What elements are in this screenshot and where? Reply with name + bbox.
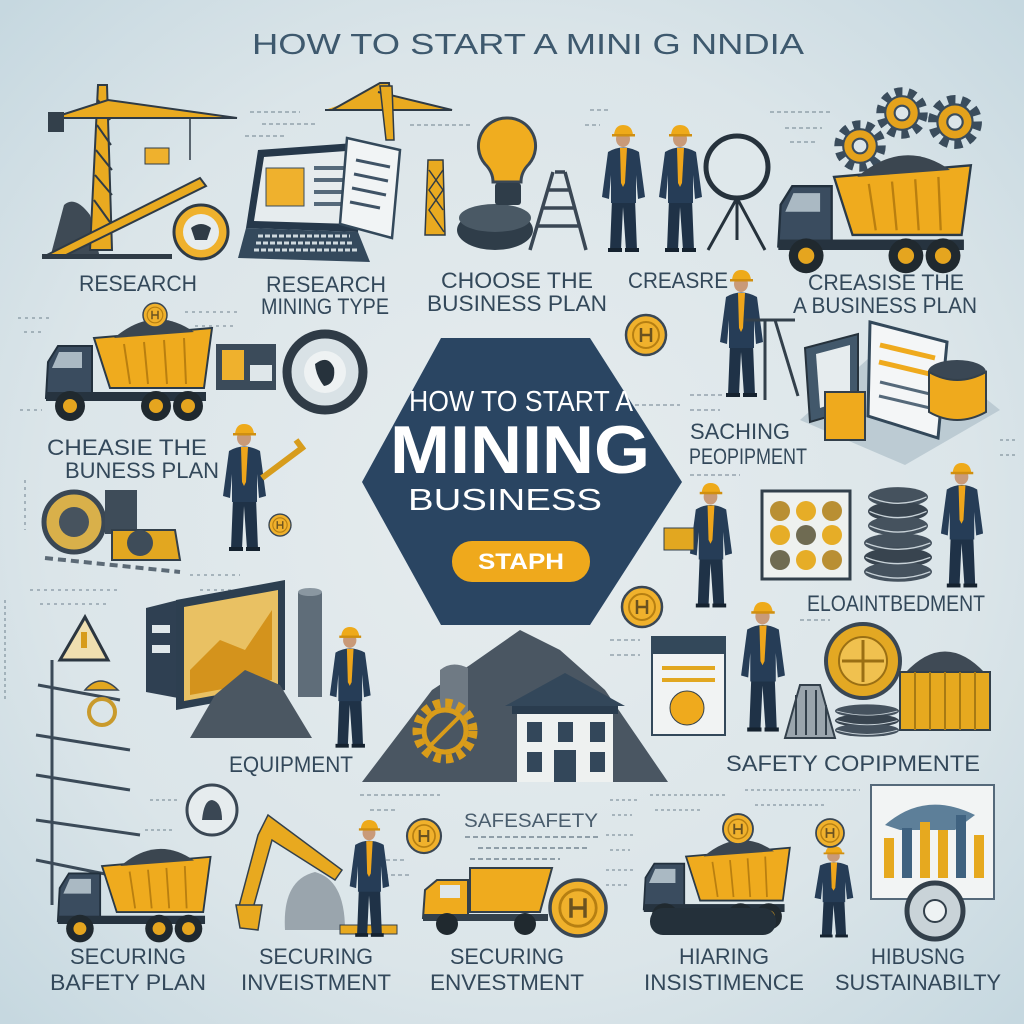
rock pile [190,670,312,738]
title: HOW TO START A MINI G NNDIA [252,29,805,61]
label: sacring equipment: SACHING [690,419,790,444]
panel: left scaffold [36,617,140,905]
monitor [176,580,285,710]
machinery rollers [785,685,899,738]
label: choose the business plan [427,268,607,316]
panel: lower right safety [652,602,990,738]
label: research mining type: RESEARCH [266,272,386,297]
silo [440,664,468,725]
label: sacring equipment [689,419,807,469]
mountain [362,630,668,782]
big gear coin [826,624,900,698]
panel: bottom excavator [236,815,397,937]
label: securing investment two [430,944,584,995]
label: equipment: EQUIPMENT [229,752,353,777]
label: chease the business plan [47,435,219,483]
label: securing investment one: INVEISTMENT [241,970,391,995]
label: chease the business plan: CHEASIE THE [47,435,207,460]
label: securing investment one: SECURING [259,944,373,969]
panel: idea bulb and ladder [425,118,586,250]
label: housing sustainability: SUSTAINABILTY [835,970,1001,995]
label: safety equipment: SAFETY COPIPMENTE [726,751,980,776]
panel: right equipment row [622,463,983,627]
panel: laptop and documents [238,83,452,262]
label: housing sustainability [835,944,1001,995]
panel: monitor and rock pile [146,580,371,748]
dump truck [778,155,971,273]
label: securing investment two: ENVESTMENT [430,970,584,995]
excavator [236,815,397,934]
machinery cluster [44,490,180,572]
bar chart [871,785,994,899]
worker [720,270,763,397]
label: securing safety plan [50,944,206,995]
surveying tool [262,440,302,478]
panel: research crane [42,85,237,259]
panel: truck and gears [778,92,977,273]
coin [269,514,291,536]
coin [622,587,662,627]
label: equipment upper: ELOAINTBEDMENT [807,591,985,616]
gears [839,92,977,167]
worker [941,463,983,587]
barrel [928,360,986,420]
button: STAPH [478,549,564,574]
worker [223,424,266,551]
coiled rope [89,699,115,725]
survey table [745,320,798,400]
label: chease the business plan: BUNESS PLAN [65,458,219,483]
worker [350,820,389,937]
gear [417,703,473,759]
label: crease the business plan: A BUSINESS PLAN [793,293,977,318]
label: housing sustainability: HIBUSNG [871,944,965,969]
label: securing safety plan: SECURING [70,944,186,969]
panel: bottom chart and worker [815,785,994,939]
panel: mountain and bank building [362,630,668,782]
coin [626,315,666,355]
hexagon main word: MINING [390,412,650,488]
tire stacks [864,487,932,582]
small coin [407,819,441,853]
label: research mining type [261,272,389,319]
button [452,541,590,582]
label: securing investment one [241,944,391,995]
panel: second row truck [46,303,363,421]
building [505,673,625,782]
dump truck [46,319,212,421]
panel: upper right worker and documents [626,270,1000,465]
panel: bottom tracked truck [644,814,790,935]
dump truck [58,849,211,942]
gear [907,883,963,939]
dark dial [287,334,363,410]
worker with box [690,483,732,607]
hexagon subheading: BUSINESS [408,482,602,517]
panel: left worker and machinery [44,424,302,572]
label: hiring insurance: INSISTIMENCE [644,970,804,995]
coin [550,880,606,936]
tracked truck body [644,840,790,930]
warning sign [60,617,108,660]
server tower [146,600,178,698]
helmet [85,681,118,690]
label: securing investment two: SECURING [450,944,564,969]
label: crease the business plan [793,270,977,318]
worker right [659,125,702,252]
box [664,528,694,550]
coin small [143,303,167,327]
yellow truck [423,868,552,935]
label: hiring insurance [644,944,804,995]
binder [805,334,865,440]
worker [815,846,853,937]
label: sacring equipment: PEOPIPMENT [689,444,807,469]
magnifier on tripod [706,136,768,250]
badge [187,785,237,835]
worker left [602,125,645,252]
label: hiring insurance: HIARING [679,944,769,969]
hexagon heading: HOW TO START A [409,386,634,418]
label: research: RESEARCH [79,271,197,296]
control box [216,344,276,390]
pipe [298,588,322,697]
label: crease: CREASRE [628,268,728,293]
panel: centre hexagon [362,338,682,625]
ground diamond [800,330,1000,465]
coin [723,814,753,844]
label: crease the business plan: CREASISE THE [808,270,964,295]
label: research mining type: MINING TYPE [261,294,389,319]
report [868,322,947,438]
label: securing safety plan: BAFETY PLAN [50,970,206,995]
coin grid [762,491,850,579]
panel: bottom truck two [407,819,606,936]
panel: bottom truck one [58,785,237,942]
ore container [900,652,990,730]
worker [741,602,785,732]
worker [330,627,371,748]
coin [816,819,844,847]
label: choose the business plan: CHOOSE THE [441,268,593,293]
label: safe safety: SAFESAFETY [464,811,598,832]
document [652,637,725,735]
label: choose the business plan: BUSINESS PLAN [427,291,607,316]
panel: two workers with magnifier [602,125,768,252]
track [650,908,776,935]
